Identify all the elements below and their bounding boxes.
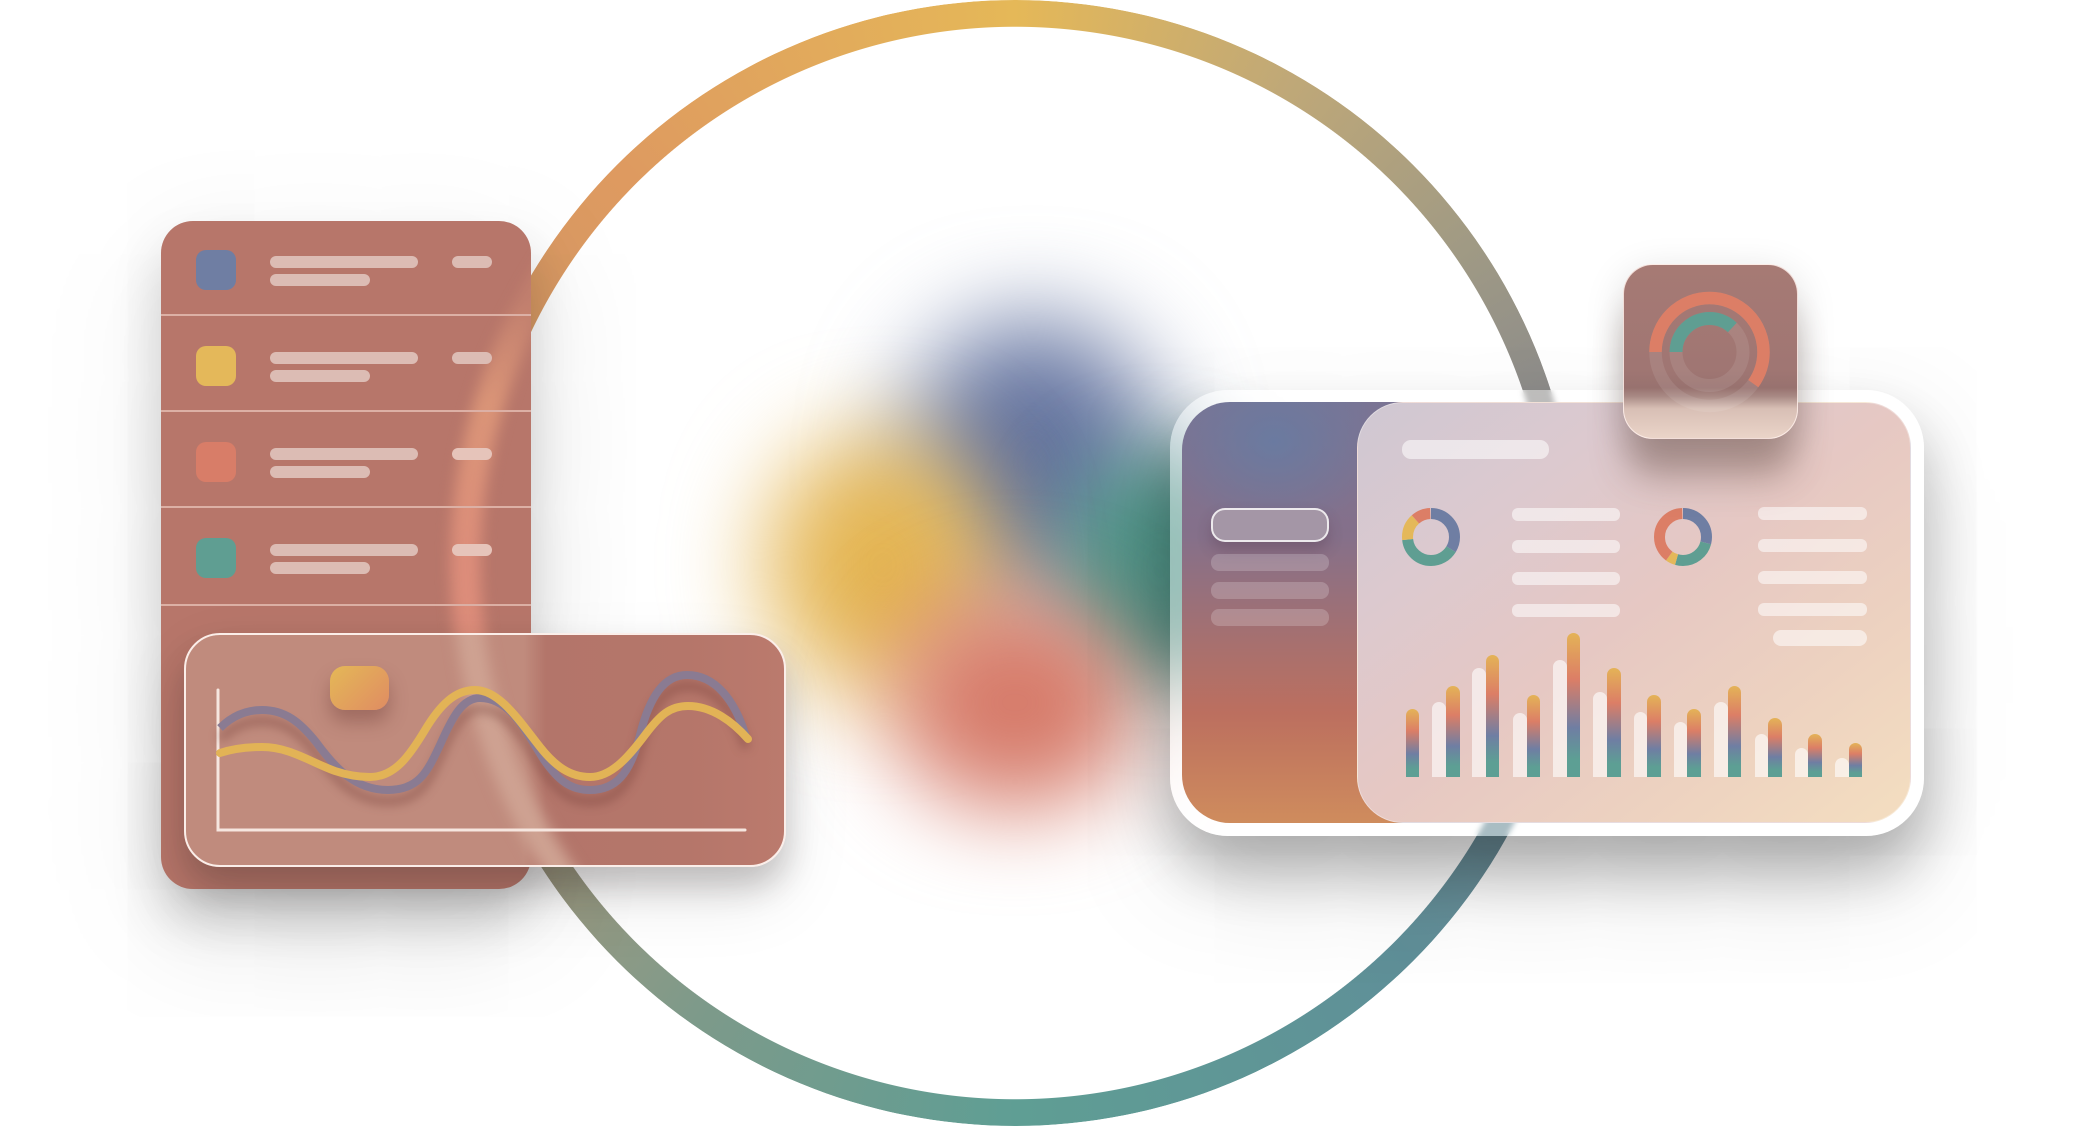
column 1 text lines <box>1512 508 1620 617</box>
row 4 value <box>452 544 492 556</box>
menu pill <box>1211 582 1329 599</box>
swatch: red <box>196 442 236 482</box>
blurred colour blobs <box>696 251 1225 874</box>
main content panel <box>1357 402 1911 823</box>
yellow series line <box>220 690 748 776</box>
row 3 sub line <box>270 466 370 478</box>
row 3 line <box>270 448 418 460</box>
blob: red <box>890 595 1140 810</box>
left list panel <box>161 221 531 889</box>
row 2 line <box>270 352 418 364</box>
orange legend pill <box>330 666 389 710</box>
menu pill <box>1211 554 1329 571</box>
row 3 <box>196 442 492 482</box>
ring seen through the card <box>465 13 1564 1112</box>
blob: teal <box>1055 450 1265 690</box>
axes <box>218 690 744 830</box>
right dashboard frame <box>1170 390 1924 836</box>
row 3 value <box>452 448 492 460</box>
active menu pill <box>1211 508 1329 542</box>
row 2 <box>196 346 492 386</box>
purple series line <box>220 674 746 790</box>
row 4 <box>196 538 492 578</box>
swatch: yellow <box>196 346 236 386</box>
row 2 sub line <box>270 370 370 382</box>
row 1 value <box>452 256 492 268</box>
row 4 line <box>270 544 418 556</box>
menu pill <box>1211 609 1329 626</box>
row 1 line <box>270 256 418 268</box>
blob: blue <box>905 320 1160 605</box>
swatch: blue <box>196 250 236 290</box>
swatch: teal <box>196 538 236 578</box>
blob: yellow <box>765 435 1000 695</box>
sidebar <box>1182 402 1482 823</box>
gradient ring <box>452 0 1578 1126</box>
donut chart 2 <box>1654 508 1712 566</box>
bar chart <box>1406 524 1862 777</box>
row 1 <box>196 250 492 290</box>
floating ring icon card <box>1622 264 1798 439</box>
donut chart 1 <box>1402 508 1460 566</box>
title pill <box>1402 440 1549 458</box>
row 1 sub line <box>270 274 370 286</box>
row 2 value <box>452 352 492 364</box>
column 2 text lines <box>1758 507 1867 646</box>
concentric ring chart <box>1649 292 1770 402</box>
line chart card <box>184 633 786 867</box>
row 4 sub line <box>270 562 370 574</box>
